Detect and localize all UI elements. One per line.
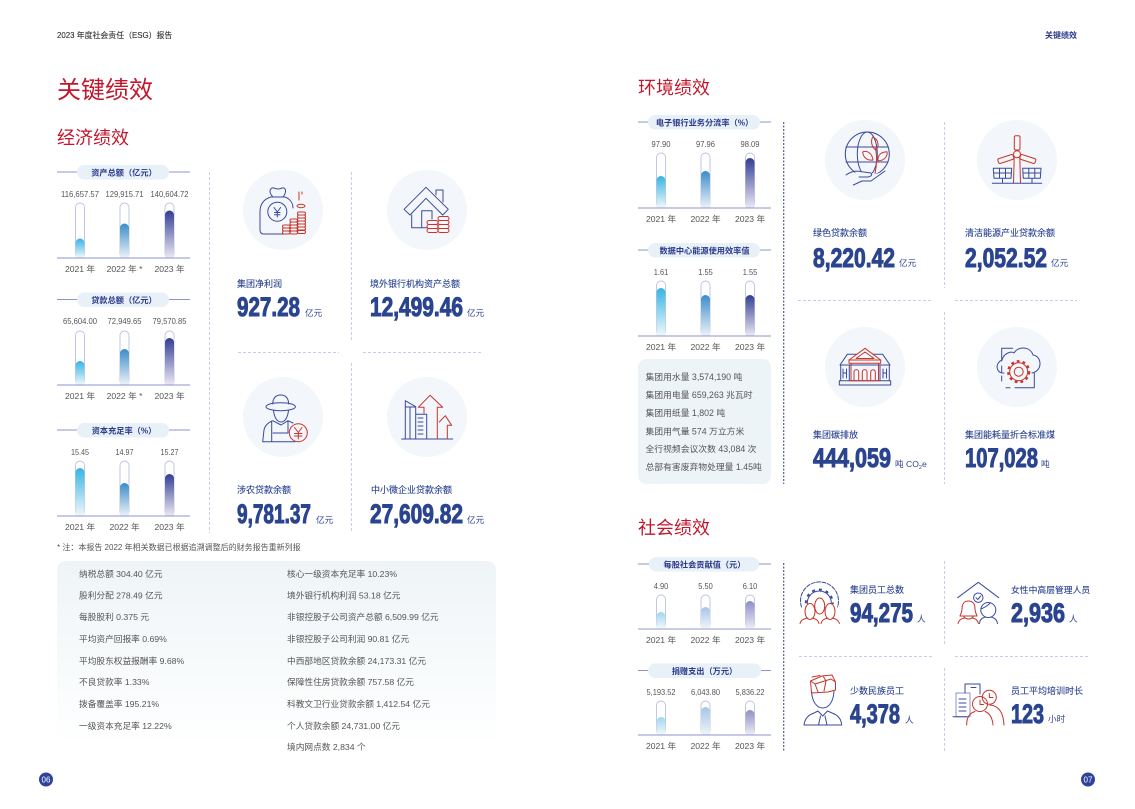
value: 444,059: [813, 443, 891, 473]
chart: e-banking ratio: 97.90: [652, 139, 671, 149]
panel: resource consumption: [638, 359, 771, 484]
chart: total loans: 2021 年: [65, 390, 95, 401]
value: 27,609.82: [370, 499, 463, 529]
chart: per-share social contribution: 5.50: [698, 581, 713, 591]
chart: total assets: [57, 165, 190, 274]
value: 123: [1011, 699, 1044, 729]
icon: people with clocks and office: [953, 684, 1004, 725]
chart: donations: 2021 年: [646, 740, 676, 751]
chart: data centre PUE: 1.55: [743, 267, 757, 277]
chart: data centre PUE: 1.61: [654, 267, 668, 277]
KPI: agriculture loans: [237, 377, 334, 529]
chart: total loans: 72,949.65: [108, 316, 142, 326]
KPI: green loans: [813, 120, 917, 273]
value: 2,936: [1011, 598, 1065, 628]
unit: 亿元: [305, 307, 323, 318]
unit: 亿元: [467, 307, 485, 318]
panel: resource consumption: 集团用纸量 1,802 吨: [646, 407, 725, 418]
chart: e-banking ratio: 2022 年: [690, 213, 721, 224]
chart: total loans: 2023 年: [154, 390, 185, 401]
unit: 亿元: [467, 514, 485, 525]
chart: data centre PUE: 2021 年: [646, 341, 676, 352]
label: 女性中高层管理人员: [1011, 584, 1090, 595]
chart: per-share social contribution: 6.10: [743, 581, 757, 591]
value: 94,275: [850, 598, 913, 628]
page number 07: 07: [1084, 776, 1093, 784]
label: 集团员工总数: [850, 584, 904, 595]
value: 927.28: [237, 292, 300, 322]
chart: capital adequacy: 资本充足率（%）: [92, 426, 156, 436]
chart: per-share social contribution: 2022 年: [690, 634, 721, 645]
chart: e-banking ratio: 电子银行业务分流率（%）: [656, 118, 753, 128]
value: 107,028: [965, 443, 1038, 473]
chart: total assets: 116,657.57: [61, 189, 99, 199]
value: 8,220.42: [813, 243, 895, 273]
panel: resource consumption: 全行视频会议次数 43,084 次: [646, 443, 757, 454]
icon: farmer with yuan coin: [263, 395, 307, 442]
page number 06: 06: [42, 776, 51, 784]
chart: donations: [638, 664, 771, 751]
panel: other economic indicators: 平均资产回报率 0.69%: [79, 633, 167, 644]
label: 集团碳排放: [813, 429, 858, 440]
heading: economic performance: 经济绩效: [57, 128, 129, 148]
chart: donations: 2022 年: [690, 740, 721, 751]
panel: other economic indicators: 股利分配 278.49 亿元: [79, 590, 163, 600]
KPI: ethnic minority employees: [804, 675, 914, 729]
page number 07: [1081, 772, 1095, 786]
chart: e-banking ratio: 2021 年: [646, 213, 676, 224]
panel: resource consumption: 集团用水量 3,574,190 吨: [646, 371, 743, 382]
panel: other economic indicators: 非银控股子公司利润 90.81 亿元: [287, 633, 409, 644]
chart: e-banking ratio: 98.09: [740, 139, 760, 149]
unit: 小时: [1048, 713, 1066, 724]
chart: donations: 5,193.52: [646, 687, 676, 697]
label: 清洁能源产业贷款余额: [965, 227, 1055, 238]
panel: other economic indicators: 核心一级资本充足率 10.23%: [287, 568, 397, 579]
chart: data centre PUE: 2022 年: [690, 341, 721, 352]
icon: person with headwrap: [804, 675, 842, 725]
label: 绿色贷款余额: [813, 227, 867, 238]
chart: total assets: 2021 年: [65, 263, 95, 274]
unit: 亿元: [1051, 257, 1069, 268]
icon: globe with sprout in hand: [845, 132, 889, 185]
panel: other economic indicators: [57, 561, 496, 755]
chart: per-share social contribution: [638, 557, 771, 645]
unit: 人: [905, 715, 914, 725]
panel: other economic indicators: 境外银行机构利润 53.18 亿元: [287, 590, 401, 600]
chart: e-banking ratio: 97.96: [696, 139, 715, 149]
unit: 亿元: [899, 257, 917, 268]
icon: money bag with coins: [260, 188, 306, 234]
chart: total loans: 2022 年 *: [107, 390, 143, 401]
icon: wind turbine and solar panels: [992, 136, 1042, 183]
chart: total assets: 资产总额（亿元）: [91, 168, 157, 178]
KPI: training hours: [953, 684, 1083, 729]
panel: other economic indicators: 每股股利 0.375 元: [79, 611, 149, 622]
unit: 人: [917, 614, 926, 624]
icon: buildings with up arrows: [402, 395, 453, 439]
page number 06: [39, 772, 53, 786]
panel: resource consumption: 集团用电量 659,263 兆瓦时: [646, 389, 753, 400]
main title: 关键绩效: [57, 77, 153, 104]
chart: donations: 2023 年: [735, 740, 765, 751]
chart: capital adequacy: 15.45: [71, 447, 89, 457]
KPI: net profit: [237, 170, 323, 322]
panel: other economic indicators: 保障性住房贷款余额 757.58 亿元: [287, 676, 414, 687]
unit: 人: [1069, 614, 1078, 624]
panel: other economic indicators: 境内网点数 2,834 个: [287, 741, 366, 752]
chart: data centre PUE: 1.55: [698, 267, 713, 277]
panel: other economic indicators: 科教文卫行业贷款余额 1,412.54 亿元: [287, 698, 430, 709]
chart: capital adequacy: 2023 年: [154, 521, 185, 532]
label: 少数民族员工: [850, 685, 904, 696]
chart: total loans: 79,570.85: [152, 316, 187, 326]
chart: total loans: 65,604.00: [63, 316, 97, 326]
panel: other economic indicators: 中西部地区贷款余额 24,173.31 亿元: [287, 655, 426, 666]
KPI: overseas assets: [370, 170, 485, 322]
panel: other economic indicators: 个人贷款余额 24,731.00 亿元: [287, 720, 400, 731]
icon: cloud and gear: [997, 348, 1040, 388]
chart: donations: 捐赠支出（万元）: [672, 666, 737, 676]
chart: per-share social contribution: 2021 年: [646, 634, 676, 645]
value: 12,499.46: [370, 292, 463, 322]
chart: data centre PUE: 2023 年: [735, 341, 765, 352]
chart: e-banking ratio: [638, 115, 771, 224]
panel: other economic indicators: 拨备覆盖率 195.21%: [79, 698, 159, 709]
KPI: carbon emissions: [813, 327, 927, 473]
running header left: 2023 年度社会责任（ESG）报告: [57, 30, 172, 40]
unit: 吨: [1041, 458, 1050, 469]
unit: 亿元: [316, 514, 334, 525]
value: 2,052.52: [965, 243, 1047, 273]
chart: donations: 6,043.80: [691, 687, 720, 697]
panel: other economic indicators: 平均股东权益报酬率 9.68%: [79, 655, 185, 666]
label: 中小微企业贷款余额: [371, 484, 452, 495]
KPI: energy consumption: [965, 327, 1057, 473]
chart: donations: 5,836.22: [736, 687, 765, 697]
running header right: 关键绩效: [1045, 30, 1077, 40]
unit: e: [922, 459, 927, 469]
chart: total assets: 129,915.71: [106, 189, 144, 199]
value: 4,378: [850, 699, 900, 729]
KPI: clean energy loans: [965, 120, 1069, 273]
panel: resource consumption: 集团用气量 574 万立方米: [646, 426, 744, 436]
label: 集团净利润: [237, 278, 282, 289]
chart: total assets: 2022 年 *: [107, 263, 143, 274]
icon: house with coins: [404, 187, 449, 232]
chart: capital adequacy: 2022 年: [109, 521, 140, 532]
chart: total assets: 2023 年: [154, 263, 185, 274]
icon: bank building: [839, 348, 891, 385]
panel: other economic indicators: 纳税总额 304.40 亿元: [79, 568, 163, 579]
label: 员工平均培训时长: [1011, 685, 1083, 696]
label: 境外银行机构资产总额: [370, 278, 460, 289]
KPI: female managers: [958, 582, 1090, 628]
panel: resource consumption: 总部有害废弃物处理量 1.45吨: [646, 461, 762, 472]
chart: capital adequacy: 15.27: [160, 447, 179, 457]
heading: environmental performance: 环境绩效: [638, 78, 710, 98]
heading: social performance: 社会绩效: [638, 518, 710, 538]
chart: per-share social contribution: 2023 年: [735, 634, 765, 645]
label: 集团能耗量折合标准煤: [965, 429, 1055, 440]
panel: other economic indicators: 非银控股子公司资产总额 6,509.99 亿元: [287, 611, 439, 622]
chart: total loans: 贷款总额（亿元）: [91, 295, 157, 305]
KPI: SME loans: [370, 377, 485, 529]
chart: total assets: 140,604.72: [150, 189, 189, 199]
value: 9,781.37: [237, 499, 311, 529]
panel: other economic indicators: 不良贷款率 1.33%: [79, 676, 150, 687]
chart: per-share social contribution: 每股社会贡献值（元）: [664, 560, 745, 570]
chart: capital adequacy: 14.97: [116, 447, 134, 457]
icon: three employees with gear: [800, 582, 840, 625]
panel: other economic indicators: 一级资本充足率 12.22%: [79, 720, 172, 731]
chart: data centre PUE: [638, 243, 771, 352]
icon: woman and man under a roof: [958, 582, 999, 624]
footnote: * 注：本报告 2022 年相关数据已根据追溯调整后的财务报告重新列报: [57, 542, 301, 552]
label: 涉农贷款余额: [237, 484, 291, 495]
chart: data centre PUE: 数据中心能源使用效率值: [659, 246, 750, 256]
unit: 吨 CO: [895, 459, 919, 469]
chart: per-share social contribution: 4.90: [654, 581, 668, 591]
chart: total loans: [57, 292, 190, 401]
chart: e-banking ratio: 2023 年: [735, 213, 765, 224]
chart: capital adequacy: [57, 423, 190, 532]
unit: 2: [919, 465, 922, 471]
KPI: employees: [800, 582, 926, 628]
chart: capital adequacy: 2021 年: [65, 521, 95, 532]
